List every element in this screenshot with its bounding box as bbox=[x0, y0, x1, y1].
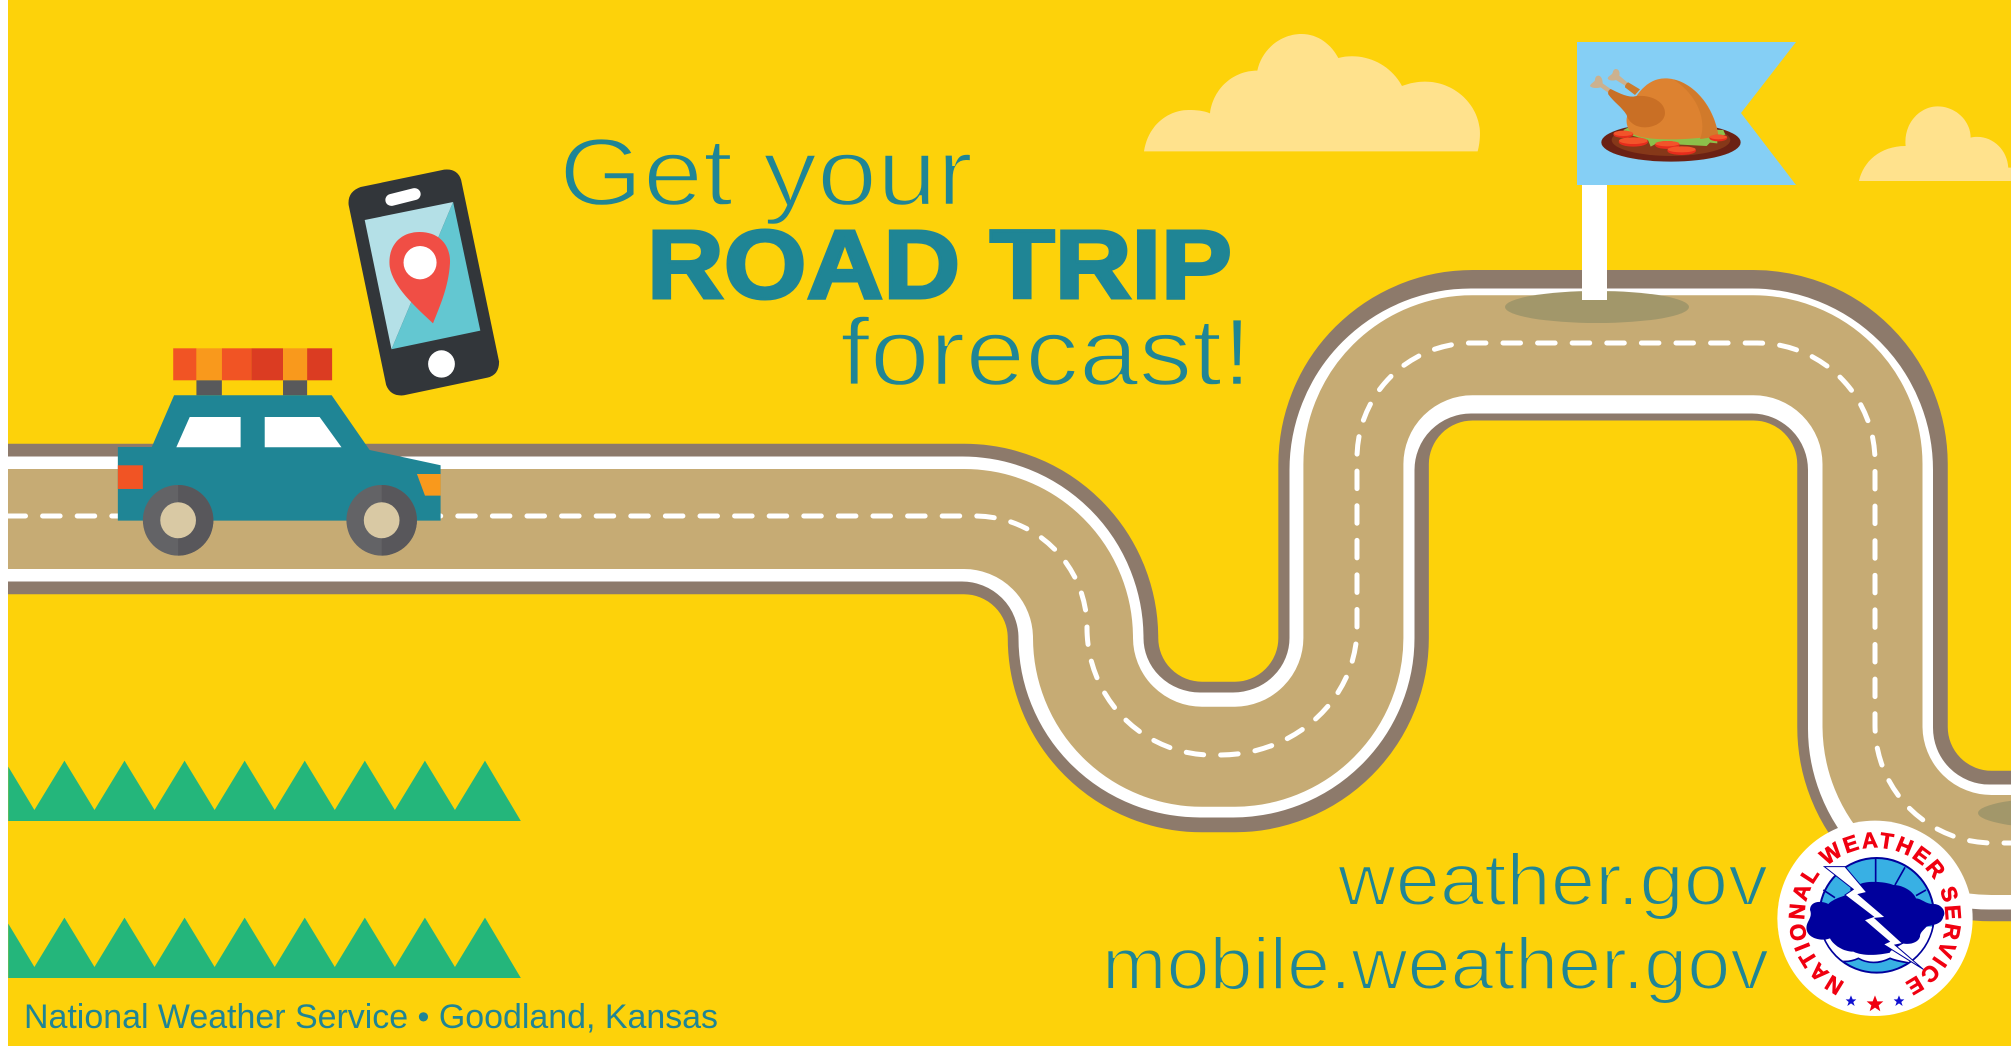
front wheel bbox=[346, 485, 417, 556]
icon: smartphone with map pin bbox=[349, 170, 499, 395]
footer credit text: National Weather Service • Goodland, Kansas bbox=[24, 998, 718, 1036]
title line: ROAD TRIP: ROAD TRIP bbox=[647, 210, 1232, 319]
grass: upper row bbox=[8, 761, 521, 821]
icon: turkey on a plate bbox=[1590, 69, 1741, 162]
logo white disc and ring text: NATIONAL WEATHER SERVICE bbox=[1788, 832, 1962, 996]
cloud: small bbox=[1859, 106, 2011, 181]
car lights bbox=[118, 465, 441, 496]
car windows bbox=[176, 417, 341, 447]
flag pole bbox=[1582, 185, 1607, 300]
title line: forecast!: forecast! bbox=[840, 299, 1252, 406]
website links bbox=[1102, 840, 1770, 1005]
car body bbox=[118, 395, 441, 521]
flag shadow on road bbox=[1505, 291, 1689, 323]
logo emblem: sky, cloud and lightning bbox=[1806, 858, 1947, 973]
car bbox=[118, 348, 441, 556]
grass: lower row bbox=[8, 918, 521, 978]
link: mobile.weather.gov: mobile.weather.gov bbox=[1102, 924, 1770, 1005]
title line: Get your: Get your bbox=[559, 119, 973, 226]
cloud: large bbox=[1144, 34, 1480, 151]
title bbox=[559, 119, 1252, 406]
logo: National Weather Service bbox=[1777, 820, 1973, 1016]
road bbox=[0, 343, 2011, 847]
second marker shadow on road bbox=[1978, 797, 2011, 829]
rear wheel bbox=[143, 485, 213, 556]
flag with turkey icon bbox=[1577, 42, 1796, 185]
link: weather.gov: weather.gov bbox=[1337, 840, 1769, 921]
roof rack luggage bbox=[173, 348, 332, 395]
